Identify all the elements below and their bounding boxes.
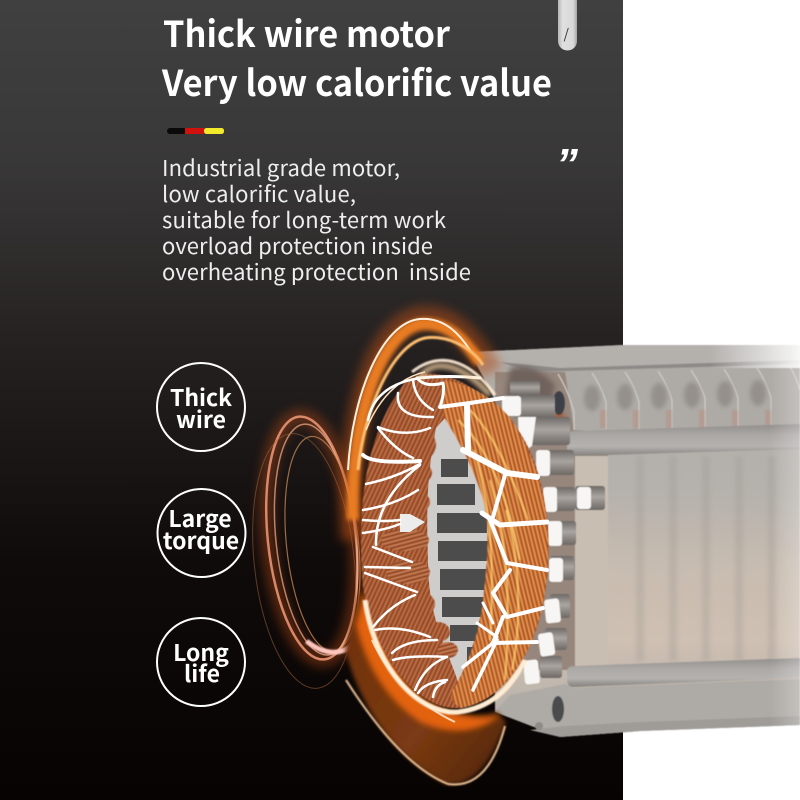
dark background panel <box>0 0 623 800</box>
badge: thick wire <box>157 363 245 451</box>
front coil band <box>443 380 548 708</box>
description text: low calorific value, <box>162 177 356 209</box>
tricolor accent bar <box>167 128 224 134</box>
glow: large upper arc <box>348 318 492 540</box>
badge: long life: life <box>184 655 220 689</box>
inner coil lobes <box>381 431 458 658</box>
handle tab: / <box>564 24 570 44</box>
badge: large torque <box>158 489 246 577</box>
shadowed left pocket <box>495 372 608 670</box>
description text: overload protection inside <box>162 229 433 261</box>
laminated slots <box>437 459 490 661</box>
badge: long life <box>157 618 245 706</box>
white connector tip <box>400 514 425 532</box>
description text: overheating protection inside <box>162 255 471 287</box>
lower lip <box>495 679 800 737</box>
title: Very low calorific value <box>161 55 552 107</box>
badge: thick wire: wire <box>176 401 226 435</box>
badge: long life: Long <box>173 634 229 668</box>
hot strands <box>458 410 528 680</box>
description text: Industrial grade motor, <box>162 151 400 183</box>
glow: small left loop <box>239 412 373 693</box>
badge: large torque: Large <box>168 500 232 534</box>
closing quote mark: ” <box>556 140 578 189</box>
badge: large torque: torque <box>163 522 239 556</box>
lower body vertical banding <box>636 456 776 661</box>
handle tab <box>558 0 577 51</box>
glow: bottom orange crescent <box>345 590 506 785</box>
badge: thick wire: Thick <box>170 379 232 413</box>
rib zone base <box>533 364 800 432</box>
right fade <box>710 340 800 368</box>
pale lower column <box>575 456 608 668</box>
stator hole <box>427 418 489 682</box>
description text <box>162 151 471 287</box>
copper ring <box>361 374 548 708</box>
housing silhouette <box>470 345 800 737</box>
stator coil ring <box>361 360 548 722</box>
left lower lacing <box>365 547 447 697</box>
lower rod <box>567 658 800 687</box>
top face <box>470 345 800 368</box>
rib holes <box>553 380 768 428</box>
rim glow <box>365 600 525 712</box>
title <box>161 6 552 107</box>
cooling rib arches <box>558 367 800 430</box>
description text: suitable for long-term work <box>162 203 446 235</box>
front band lacing <box>417 376 547 690</box>
white lacing ties <box>363 376 547 697</box>
motor housing <box>470 340 800 737</box>
left upper lacing <box>363 378 433 545</box>
title: Thick wire motor <box>163 6 450 58</box>
upper rod <box>567 424 800 456</box>
wire pins <box>502 381 605 685</box>
